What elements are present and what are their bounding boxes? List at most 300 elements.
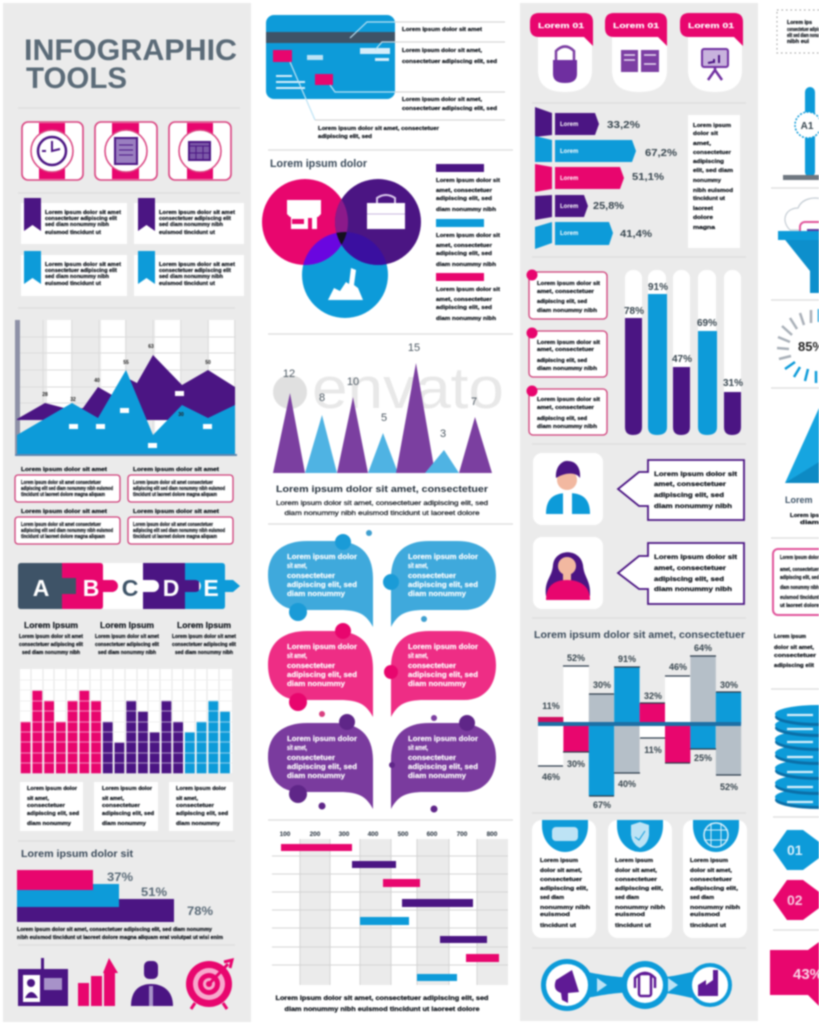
peak chart: 10	[347, 376, 359, 388]
stepped bar chart: 51%	[141, 885, 167, 899]
diverging bar chart: 30%	[593, 680, 611, 690]
speech arrow: woman: diam nonummy nibh	[654, 586, 732, 593]
bubble: purple right: Lorem ipsum dolor	[408, 736, 478, 743]
bubble: blue right	[383, 541, 496, 627]
bubble: blue left: adipiscing elit, sed	[287, 582, 357, 589]
rounded column chart	[624, 270, 743, 435]
text boxes under area chart: Lorem ipsum dolor sit amet	[21, 467, 107, 473]
data labels: 32	[70, 397, 76, 403]
card: chat: tincidunt ut	[540, 923, 576, 929]
ribbon bar chart: Lorem	[560, 122, 578, 128]
bubble: pink right: diam nonummy	[408, 681, 466, 688]
credit card	[266, 15, 395, 120]
rounded column chart: 78%	[624, 306, 644, 317]
dotted note box: nibh eui	[787, 39, 809, 45]
card: chat: Lorem ipsum	[540, 858, 578, 864]
icon: calendar	[169, 122, 231, 180]
ribbon side text card: Lorem ipsum	[693, 123, 731, 129]
diverging bar chart	[538, 643, 741, 810]
stepped bar chart: 37%	[107, 870, 133, 884]
ribbon side text card: nonummy	[693, 178, 722, 184]
bubble: pink right	[384, 631, 496, 721]
small text block: consectetuer	[774, 653, 817, 659]
gantt chart: 400	[368, 831, 379, 838]
funnel icon	[778, 198, 819, 293]
bubble: blue left: consectetuer	[287, 573, 335, 580]
ribbon bar chart: Lorem	[560, 231, 578, 237]
bubble: pink left	[268, 623, 373, 717]
puzzle captions	[19, 621, 236, 656]
text cards under cell chart: adipiscing elit, sed	[27, 811, 80, 817]
venn legend: diam nonummy nibh	[436, 207, 497, 213]
speech arrow: woman: Lorem ipsum dolor sit	[654, 554, 738, 561]
venn legend	[436, 164, 500, 322]
icon: document	[95, 122, 157, 180]
text boxes under area chart: tincidunt ut laoreet dolore magna aliquam	[21, 534, 105, 540]
bookmark cards: consectetuer adipiscing elit	[45, 268, 117, 274]
numbered arrow 01: 01	[787, 842, 803, 858]
pink outlined callout	[773, 549, 819, 615]
area chart	[15, 320, 237, 456]
card: shield	[608, 820, 672, 938]
card: globe: sed diam	[690, 895, 714, 901]
card: globe: tincidunt ut	[690, 923, 726, 929]
speech arrow: man: adipiscing elit, sed	[654, 492, 724, 499]
diverging bar chart: 40%	[618, 779, 636, 789]
peak chart: 8	[319, 392, 325, 404]
heading: stepped bars: Lorem ipsum dolor sit	[21, 849, 134, 860]
ribbon side text card: nibh euismod	[693, 188, 734, 194]
venn legend: Lorem ipsum dolor sit	[436, 233, 500, 239]
avatar card: man	[533, 453, 603, 525]
speech arrow: man: amet, consectetuer	[654, 481, 727, 488]
gantt chart: 800	[487, 831, 498, 838]
card: shield: dolor sit amet,	[615, 868, 657, 874]
text cards under cell chart: diam nonummy	[27, 821, 72, 827]
card: chat: euismod	[540, 912, 571, 918]
diverging bar chart: 46%	[542, 772, 560, 782]
pyramid triangle: diam	[800, 520, 819, 526]
text boxes under area chart: adipiscing elit sed diam nonummy nibh euismod	[21, 486, 113, 492]
text boxes under area chart: tincidunt ut laoreet dolore magna aliquam	[21, 492, 105, 498]
peak chart: 15	[408, 342, 420, 354]
ribbon bar chart: 67,2%	[645, 148, 677, 159]
diverging bar chart: 25%	[694, 753, 712, 763]
bullet callouts: amet, consectetuer	[537, 405, 595, 411]
text cards under cell chart: Lorem ipsum dolor	[102, 786, 153, 792]
ribbon side text card: consectetuer	[693, 150, 732, 156]
diverging bar chart: 91%	[618, 654, 636, 664]
text boxes under area chart	[15, 467, 233, 544]
peak chart caption: Lorem ipsum dolor sit amet, consectetuer adipiscing elit, sed	[276, 500, 488, 507]
ribbon bar chart: Lorem	[560, 204, 578, 210]
peak chart caption	[276, 484, 488, 517]
text cards under cell chart: adipiscing elit, sed	[102, 811, 155, 817]
bubble: pink right: adipiscing elit, sed	[408, 672, 478, 679]
bubble: purple left	[268, 714, 373, 810]
speech bubbles	[268, 530, 496, 812]
bubble: pink left: consectetuer	[287, 663, 335, 670]
bullet callouts: amet, consectetuer	[537, 347, 595, 353]
bubble: pink right: consectetuer	[408, 663, 456, 670]
puzzle captions: sed diam nonummy nibh	[98, 650, 157, 656]
dotted note box: Lorem ips	[787, 20, 812, 26]
card: globe: Lorem ipsum	[690, 858, 728, 864]
gantt chart	[272, 831, 508, 985]
puzzle captions: Lorem Ipsum	[177, 621, 231, 630]
bullet callouts: amet, consectetuer	[537, 289, 595, 295]
stepped bar caption: Lorem ipsum dolor sit amet, consectetuer adipiscing elit, sed diam nonummy	[17, 927, 213, 933]
icon: id badge	[18, 958, 68, 1006]
rounded column chart: 47%	[672, 354, 692, 365]
puzzle A to E: D	[163, 575, 179, 601]
bubble: blue right: diam nonummy	[408, 591, 466, 598]
gantt chart: 300	[339, 831, 350, 838]
speech arrow: woman: amet, consectetuer	[654, 565, 727, 572]
stepped bar chart	[17, 870, 213, 922]
speech arrow: woman: adipiscing elit, sed	[654, 576, 724, 583]
text cards under cell chart: consectetuer	[102, 803, 141, 809]
icon: bookmark blue	[24, 251, 41, 284]
ribbon side text card: elit, sed diam	[693, 168, 733, 174]
card: monitor: Lorem 01	[688, 23, 734, 30]
puzzle captions: Lorem Ipsum	[24, 621, 78, 630]
numbered arrow 02: 02	[787, 892, 803, 908]
data labels: 30	[178, 412, 184, 418]
bookmark cards: Lorem ipsum dolor sit amet	[159, 210, 235, 216]
pink percentage arrow box	[770, 942, 819, 1006]
card: chat: nonummy nibh	[540, 905, 591, 911]
bubble: pink left: adipiscing elit, sed	[287, 672, 357, 679]
progress dial	[777, 309, 819, 383]
data labels: 55	[123, 360, 129, 366]
bullet callouts	[526, 270, 607, 435]
venn legend: adipiscing elit, sed	[436, 196, 493, 202]
ribbon bar chart: 41,4%	[620, 229, 652, 240]
card: globe: adipiscing elit,	[690, 886, 739, 892]
ribbon side text card: dolore	[693, 215, 713, 221]
puzzle captions: Lorem ipsum dolor sit amet	[19, 634, 83, 640]
puzzle captions: consectetuer adipiscing elit	[172, 642, 236, 648]
gantt chart: 100	[280, 831, 291, 838]
blue area series	[17, 370, 235, 455]
pillar icon A1: A1	[801, 121, 814, 132]
text boxes under area chart: adipiscing elit sed diam nonummy nibh euismod	[21, 528, 113, 534]
puzzle captions: consectetuer adipiscing elit	[19, 642, 83, 648]
diverging bar chart: 64%	[694, 643, 712, 653]
card: shield: consectetuer	[615, 877, 658, 883]
icon text cards	[532, 820, 747, 938]
bullet callouts: diam nonummy nibh	[537, 308, 598, 314]
puzzle captions: sed diam nonummy nibh	[175, 650, 234, 656]
diverging bar chart: 52%	[567, 653, 585, 663]
card: shield: nonummy nibh	[615, 905, 666, 911]
peak chart: 3	[440, 428, 446, 440]
credit card callouts: consectetuer adipiscing elit, sed	[402, 59, 498, 65]
text cards under cell chart: consectetuer	[27, 803, 66, 809]
text cards under cell chart: consectetuer	[176, 803, 215, 809]
bullet callouts: adipiscing elit, sed	[537, 299, 588, 305]
gantt chart: 200	[310, 831, 321, 838]
pyramid triangle: Lorem ips	[790, 513, 819, 519]
gantt chart: 700	[457, 831, 468, 838]
credit card callouts	[315, 22, 505, 140]
title: INFOGRAPHIC	[24, 34, 237, 67]
icon: bookmark purple	[24, 198, 41, 231]
peak chart	[273, 342, 492, 473]
bubble: pink left: Lorem ipsum dolor	[287, 644, 357, 651]
ribbon bar chart: 51,1%	[632, 172, 664, 183]
peak chart: 12	[283, 368, 295, 380]
stepped bar caption: nibh euismod tincidunt ut laoreet dolore magna aliquam erat volutpat ut wisi enim	[17, 935, 223, 941]
bubble: blue right: Lorem ipsum dolor	[408, 554, 478, 561]
text boxes under area chart: Lorem ipsum dolor sit amet consectetuer	[133, 480, 214, 486]
bubble: purple right: diam nonummy	[408, 773, 466, 780]
icon: growth bars	[78, 958, 118, 1006]
credit card callouts: consectetuer adipiscing elit, sed	[402, 106, 498, 112]
bookmark cards: Lorem ipsum dolor sit amet	[45, 210, 121, 216]
bubble: purple left: diam nonummy	[287, 773, 345, 780]
small text block: adipiscing elit	[774, 663, 814, 669]
ribbon bar chart: Lorem	[560, 149, 578, 155]
card: shield: Lorem ipsum	[615, 858, 653, 864]
text boxes under area chart: tincidunt ut laoreet dolore magna aliquam	[133, 534, 217, 540]
rounded column chart: 91%	[648, 282, 668, 293]
card: book: Lorem 01	[613, 23, 659, 30]
text cards under cell chart: Lorem ipsum dolor	[176, 786, 227, 792]
speech arrow: man: Lorem ipsum dolor sit	[654, 471, 738, 478]
bubble: pink right: Lorem ipsum dolor	[408, 644, 478, 651]
venn legend: amet, consectetuer	[436, 297, 493, 303]
bullet callouts: diam nonummy nibh	[537, 366, 598, 372]
card: globe: euismod	[690, 912, 721, 918]
bullet callouts: adipiscing elit, sed	[537, 358, 588, 364]
diverging bar chart: 30%	[720, 680, 738, 690]
bookmark cards: consectetuer adipiscing elit	[45, 216, 117, 222]
card: globe	[683, 820, 747, 938]
diverging bar chart: 32%	[644, 691, 662, 701]
bookmark cards: sed diam nonummy nibh	[45, 222, 110, 228]
venn legend: amet, consectetuer	[436, 243, 493, 249]
text boxes under area chart: Lorem ipsum dolor sit amet consectetuer	[133, 522, 214, 528]
diverging bar chart: 67%	[593, 800, 611, 810]
text cards under cell chart: Lorem ipsum dolor	[27, 786, 78, 792]
bubble: purple right: consectetuer	[408, 755, 456, 762]
icon: clock	[22, 122, 83, 180]
card: shield: euismod	[615, 912, 646, 918]
gantt caption: Lorem ipsum dolor sit amet, consectetuer adipiscing elit, sed	[276, 995, 489, 1002]
ribbon side text card: adipiscing	[693, 159, 725, 165]
title	[24, 34, 237, 95]
bubble: purple left: sit amet,	[287, 745, 307, 752]
bubble: purple right: adipiscing elit, sed	[408, 764, 478, 771]
rounded column chart: 31%	[723, 378, 743, 389]
title: TOOLS	[26, 62, 127, 95]
credit card callouts: Lorem ipsum dolor sit amet, consectetuer	[318, 126, 440, 132]
text boxes under area chart: Lorem ipsum dolor sit amet	[21, 509, 107, 515]
gantt caption: diam nonummy nibh euismod tincidunt ut laoreet dolore	[284, 1006, 480, 1013]
venn diagram	[262, 179, 421, 318]
text boxes under area chart: Lorem ipsum dolor sit amet consectetuer	[21, 522, 102, 528]
ribbon bar chart: Lorem	[560, 176, 578, 182]
bubble: blue right: adipiscing elit, sed	[408, 582, 478, 589]
puzzle A to E: C	[122, 575, 138, 601]
venn legend: adipiscing elit, sed	[436, 305, 493, 311]
bullet callouts: Lorem ipsum dolor sit	[537, 397, 600, 403]
watermark: envato	[312, 356, 504, 421]
bookmark cards: sed diam nonummy nibh	[159, 222, 224, 228]
square-cell bar chart	[20, 669, 232, 773]
venn legend: amet, consectetuer	[436, 188, 493, 194]
bullet callouts: Lorem ipsum dolor sit	[537, 281, 600, 287]
bookmark cards: consectetuer adipiscing elit	[159, 216, 231, 222]
icon row: three framed icons	[22, 122, 231, 180]
peak chart caption: Lorem ipsum dolor sit amet, consectetuer	[276, 484, 488, 495]
card: globe: dolor sit amet,	[690, 868, 732, 874]
connected circle icons	[541, 959, 732, 1011]
ribbon side text card: magna	[693, 225, 716, 231]
puzzle A to E: B	[83, 575, 99, 601]
card: lock	[530, 13, 593, 92]
bubble: purple right	[389, 715, 496, 812]
card: chat: dolor sit amet,	[540, 868, 582, 874]
puzzle A to E: E	[203, 575, 219, 601]
card: chat: sed diam	[540, 895, 564, 901]
bookmark cards: euismod tincidunt ut	[45, 230, 101, 236]
small text block: dolor sit amet,	[774, 645, 814, 651]
gantt chart: 500	[398, 831, 409, 838]
icon: headset	[635, 973, 655, 996]
text cards under cell chart: diam nonummy	[102, 821, 147, 827]
data labels: 50	[205, 360, 211, 366]
data labels: 28	[42, 392, 48, 398]
stacked database discs	[775, 705, 819, 809]
puzzle captions: Lorem ipsum dolor sit amet	[172, 634, 236, 640]
icon: megaphone	[555, 970, 579, 1003]
venn legend: Lorem ipsum dolor sit	[436, 287, 500, 293]
bookmark cards	[21, 198, 244, 296]
bubble: blue left: diam nonummy	[287, 591, 345, 598]
text boxes under area chart: adipiscing elit sed diam nonummy nibh euismod	[133, 486, 225, 492]
speech arrow: woman	[618, 543, 744, 604]
bubble: purple left: Lorem ipsum dolor	[287, 736, 357, 743]
text cards under cell chart: diam nonummy	[176, 821, 221, 827]
text boxes under area chart: Lorem ipsum dolor sit amet	[133, 509, 219, 515]
card: chat: consectetuer	[540, 877, 583, 883]
panel: left column background	[3, 3, 251, 1022]
bubble: purple left: adipiscing elit, sed	[287, 764, 357, 771]
small text block: Lorem ipsum	[774, 634, 806, 640]
pyramid triangle: Lorem	[785, 495, 813, 505]
bookmark cards: sed diam nonummy nibh	[159, 274, 224, 280]
lorem label cards with icons	[530, 13, 743, 92]
icon: mountain	[328, 268, 363, 300]
bubble: blue right: sit amet,	[408, 563, 428, 570]
gantt chart: 600	[427, 831, 438, 838]
bubble: pink left: diam nonummy	[287, 681, 345, 688]
text cards under cell chart: adipiscing elit, sed	[176, 811, 229, 817]
numbered arrow 01	[773, 830, 819, 870]
puzzle captions: consectetuer adipiscing elit	[95, 642, 159, 648]
stepped bar chart: 78%	[187, 904, 213, 918]
bubble: blue left	[268, 530, 373, 627]
small text block	[774, 634, 817, 669]
text cards under cell chart	[20, 782, 233, 831]
bubble: purple left: consectetuer	[287, 755, 335, 762]
text boxes under area chart: tincidunt ut laoreet dolore magna aliquam	[133, 492, 217, 498]
card: lock: Lorem 01	[538, 23, 584, 30]
peak chart: 7	[471, 396, 477, 408]
stepped bar caption	[17, 927, 223, 941]
avatar card: woman	[533, 537, 603, 609]
text boxes under area chart: Lorem ipsum dolor sit amet consectetuer	[21, 480, 102, 486]
bookmark cards: euismod tincidunt ut	[159, 230, 215, 236]
icon: businessman	[131, 961, 173, 1006]
puzzle captions: sed diam nonummy nibh	[22, 650, 81, 656]
card: book	[605, 13, 667, 92]
credit card callouts: Lorem ipsum dolor sit amet	[402, 27, 482, 33]
bubble: blue right: consectetuer	[408, 573, 456, 580]
ribbon side text card: tincidunt ut	[693, 196, 725, 202]
bubble: blue left: sit amet,	[287, 563, 307, 570]
bubble: purple right: sit amet,	[408, 745, 428, 752]
data labels: 63	[148, 344, 154, 350]
card: shield: tincidunt ut	[615, 923, 651, 929]
ribbon side text card: laoreet	[693, 206, 713, 212]
diverging bar chart: 46%	[669, 662, 687, 672]
bubble: pink right: sit amet,	[408, 653, 428, 660]
speech arrow: man: diam nonummy nibh	[654, 503, 732, 510]
rounded column chart: 69%	[697, 318, 717, 329]
speech arrow: man	[618, 460, 744, 520]
pyramid triangle	[785, 408, 819, 526]
card: shield: adipiscing elit,	[615, 886, 664, 892]
card: shield: sed diam	[615, 895, 639, 901]
venn legend: Lorem ipsum dolor sit	[436, 178, 500, 184]
bookmark cards: Lorem ipsum dolor sit amet	[45, 262, 121, 268]
credit card callouts: Lorem ipsum dolor sit amet,	[402, 97, 482, 103]
ribbon side text card: amet,	[693, 141, 712, 147]
icon: factory	[698, 970, 718, 996]
bookmark cards: consectetuer adipiscing elit	[159, 268, 231, 274]
card: globe: consectetuer	[690, 877, 733, 883]
icon: bookmark purple 2	[138, 198, 155, 231]
puzzle captions: Lorem Ipsum	[100, 621, 154, 630]
icon: shop	[287, 200, 321, 229]
bookmark cards: Lorem ipsum dolor sit amet	[159, 262, 235, 268]
bookmark cards: euismod tincidunt ut	[45, 281, 101, 287]
icon: briefcase	[367, 195, 405, 229]
card: globe: nonummy nibh	[690, 905, 741, 911]
ribbon bar chart: 33,2%	[607, 120, 640, 131]
text cards under cell chart: sit amet,	[27, 796, 49, 802]
data labels	[42, 344, 211, 418]
bookmark cards: euismod tincidunt ut	[159, 281, 215, 287]
venn legend: diam nonummy nibh	[436, 316, 497, 322]
bullet callouts: adipiscing elit, sed	[537, 416, 588, 422]
purple area series	[17, 355, 235, 420]
bookmark cards: sed diam nonummy nibh	[45, 274, 110, 280]
panel: third column background	[520, 3, 758, 1021]
icon: bookmark blue 2	[138, 251, 155, 284]
bullet callouts: diam nonummy nibh	[537, 424, 598, 430]
puzzle captions: Lorem ipsum dolor sit amet	[95, 634, 159, 640]
gantt caption	[276, 995, 489, 1013]
credit card callouts: Lorem ipsum dolor sit amet,	[402, 48, 482, 54]
bubble: pink left: sit amet,	[287, 653, 307, 660]
diverging bar chart: 11%	[644, 745, 662, 755]
icon: target	[186, 960, 232, 1009]
